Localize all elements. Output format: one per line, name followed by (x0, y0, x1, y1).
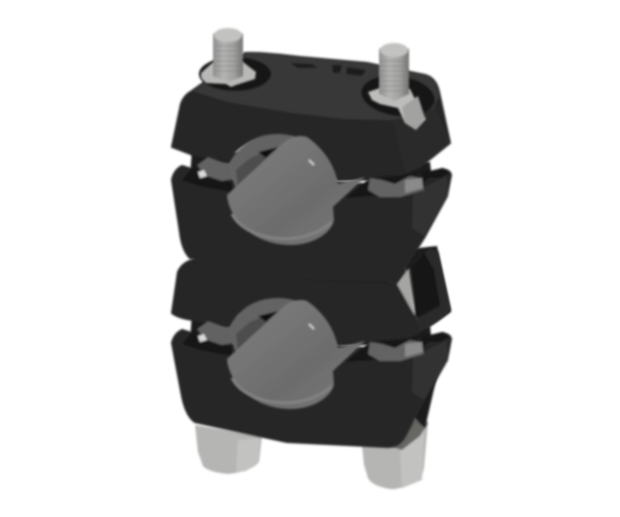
tube rim highlight (232, 378, 332, 403)
right lower hardware shadow (392, 419, 428, 450)
right grip ledge (345, 339, 430, 362)
left top bolt (213, 28, 243, 82)
left bolt recess (199, 57, 271, 91)
right grey rubber bead (368, 176, 424, 197)
lower bolts and nuts (195, 415, 428, 489)
lower clamp: upper block (172, 248, 451, 345)
right top bolt (379, 43, 409, 101)
left lower nut (195, 425, 262, 474)
upper block top surface (193, 53, 439, 120)
top clamp: lower block (172, 157, 451, 282)
upper block body (172, 53, 450, 180)
top clamp: upper block (172, 53, 450, 180)
right side face (412, 340, 448, 400)
lower clamp back bracket (400, 246, 451, 428)
tube face (227, 136, 365, 245)
tube rim highlight (232, 214, 332, 239)
lower clamp: lower block (172, 321, 451, 447)
tube back wall (228, 298, 337, 364)
dark backing of clamp gaps (190, 150, 432, 344)
top clamp: handlebar tube (227, 134, 365, 245)
tube back wall (228, 134, 337, 200)
right grey rubber bead (368, 340, 424, 361)
grey gap behind nut (397, 268, 415, 316)
lower clamp: handlebar tube (227, 298, 365, 409)
left grip ledge (182, 168, 232, 192)
right grip ledge (345, 175, 430, 198)
right bolt recess (359, 71, 437, 121)
top surface logo (290, 63, 366, 76)
rear opening frame (410, 248, 451, 332)
left grip ledge (182, 332, 232, 356)
tube face (227, 300, 365, 409)
right side face (412, 176, 448, 236)
left grey rubber bead (197, 157, 240, 181)
right top nut (368, 88, 426, 130)
left grey rubber bead (197, 321, 240, 345)
right side face (393, 108, 450, 172)
left top nut (201, 62, 256, 87)
right lower nut (362, 415, 428, 489)
